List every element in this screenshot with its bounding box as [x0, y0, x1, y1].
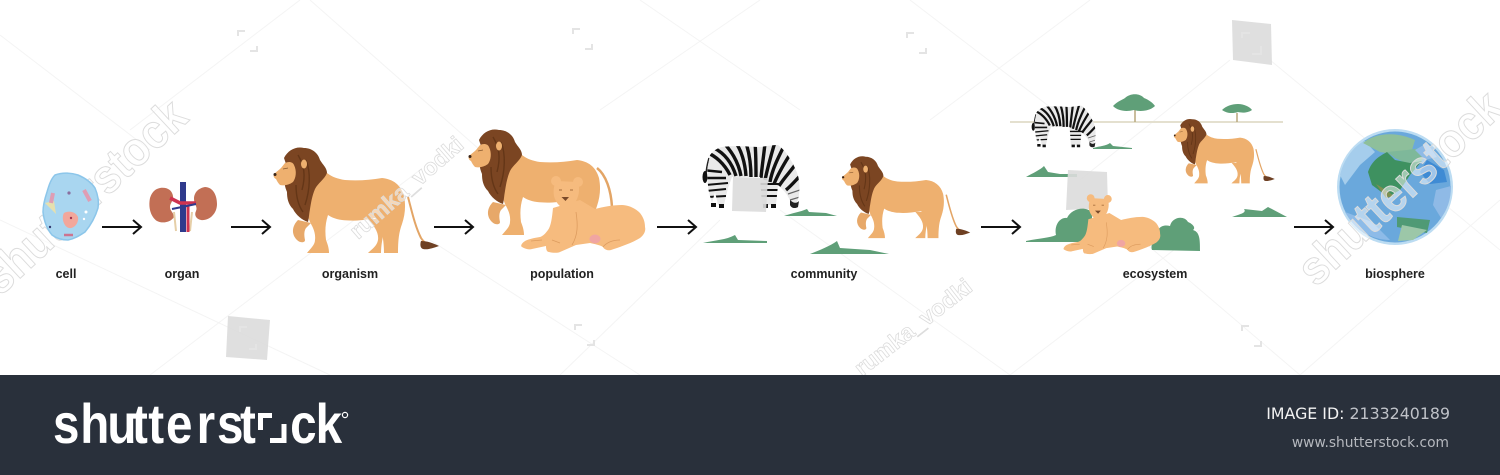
arrow 3 [434, 220, 473, 234]
watermark web lines [0, 0, 1500, 375]
watermark: small logo marks [238, 29, 1261, 346]
watermark: grey square top right [1232, 20, 1272, 65]
footer logo: shutterstock [53, 393, 342, 456]
site url: www.shutterstock.com [1292, 435, 1449, 451]
labels [56, 267, 1425, 281]
labels: community [791, 267, 857, 281]
arrow 5 [981, 220, 1020, 234]
population group [468, 129, 645, 253]
labels: cell [56, 267, 76, 281]
watermark: grey square bottom left [226, 316, 270, 360]
arrow 1 [102, 220, 141, 234]
icon: cell [43, 173, 98, 240]
footer bar [0, 375, 1500, 475]
labels: biosphere [1365, 267, 1425, 281]
community group [702, 142, 970, 254]
watermark: rumka_vodki lower: rumka_vodki [849, 273, 977, 381]
labels: organism [322, 267, 378, 281]
arrow 4 [657, 220, 696, 234]
labels: population [530, 267, 594, 281]
ecosystem group [1010, 94, 1287, 254]
arrow 6 [1294, 220, 1333, 234]
icon: globe [1337, 129, 1453, 245]
watermark: rumka_vodki left: rumka_vodki [344, 131, 468, 244]
labels: organ [165, 267, 199, 281]
icon: kidneys [149, 182, 217, 232]
image id: IMAGE ID: 2133240189 [1266, 404, 1450, 423]
arrow 2 [231, 220, 270, 234]
organism lion [274, 147, 439, 253]
labels: ecosystem [1123, 267, 1187, 281]
